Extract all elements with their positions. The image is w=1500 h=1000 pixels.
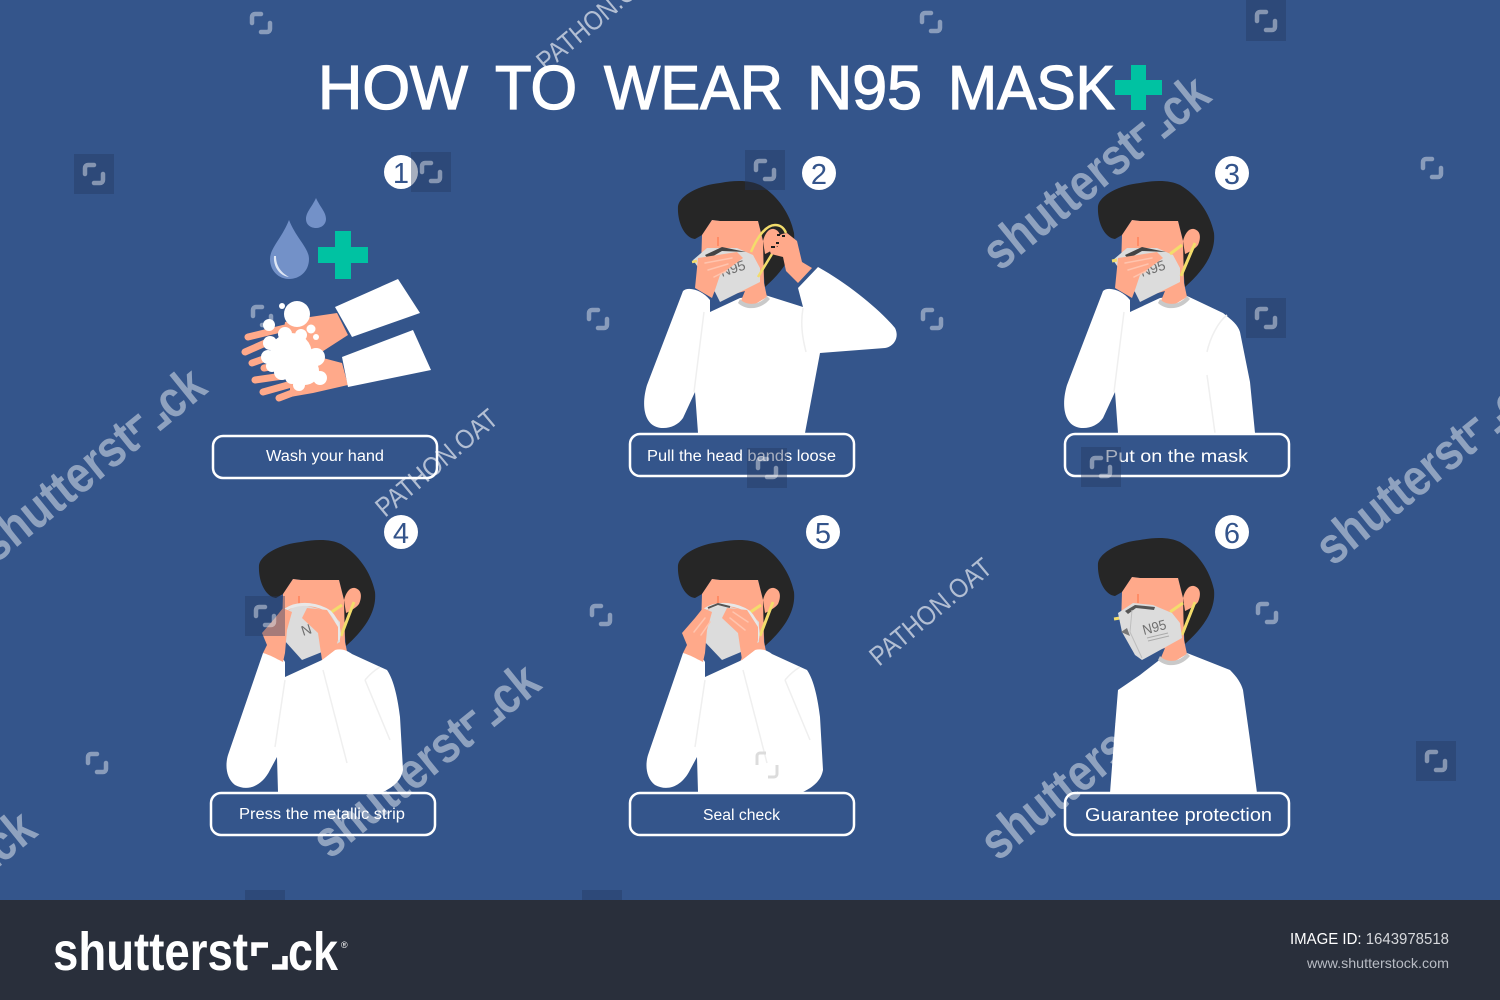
torso and arm (646, 649, 823, 792)
collar (1158, 296, 1190, 308)
label box 1 (213, 436, 437, 478)
watermarks: shutterst (968, 708, 1150, 871)
label box 1: Wash your hand (266, 448, 384, 465)
title: HOW (318, 54, 468, 123)
torso and arm (1064, 289, 1255, 433)
hand (1115, 252, 1163, 298)
label box 4 (211, 793, 435, 835)
panel: step 2 pull the head bands loose (630, 156, 897, 476)
label box 5: Seal check (703, 807, 780, 824)
collar (738, 296, 770, 308)
step number 4 (384, 515, 418, 550)
icon: soapy hands (245, 279, 431, 398)
hands (682, 608, 758, 662)
title: TO (495, 54, 577, 123)
watermarks: PATHON.OAT (370, 403, 504, 523)
footer logo: ® (341, 940, 348, 950)
title: MASK (948, 54, 1115, 123)
yellow bands (749, 602, 773, 636)
step number 3: 3 (1224, 159, 1240, 191)
collar (1158, 653, 1190, 665)
label box 4: Press the metallic strip (239, 806, 405, 823)
watermarks: shutterst (300, 706, 482, 869)
step number 2: 2 (811, 159, 827, 191)
mask (703, 604, 759, 660)
torso and arm (226, 649, 403, 792)
panel: step 6 guarantee protection (1065, 515, 1289, 835)
step number 5 (806, 515, 840, 550)
panel: step 5 seal check (630, 515, 854, 835)
step number 5: 5 (815, 518, 831, 550)
footer logo: ck (288, 922, 339, 982)
head and hair (678, 540, 794, 665)
yellow bands (1114, 602, 1195, 635)
icon: green cross (318, 231, 368, 279)
torso (1110, 653, 1257, 793)
step number 1: 1 (393, 158, 409, 190)
step number 2 (802, 156, 836, 191)
panel: step 4 press the metallic strip (211, 515, 435, 835)
panel: step 1 wash your hand (213, 155, 437, 478)
mask (693, 248, 760, 302)
step number 6: 6 (1224, 518, 1240, 550)
label box 3: Put on the mask (1105, 446, 1248, 466)
step number 1 (384, 155, 418, 190)
mask text: N95 (1138, 257, 1168, 280)
title: N95 (807, 54, 922, 123)
yellow bands (1112, 243, 1195, 276)
footer bar (0, 900, 1500, 1000)
label box 3 (1065, 434, 1289, 476)
figure 5 (646, 540, 823, 792)
head and hair (1098, 181, 1214, 306)
image id: IMAGE ID: 1643978518 (1290, 931, 1449, 948)
mask (1113, 248, 1180, 302)
mask text: N (299, 621, 314, 639)
yellow bands (330, 602, 354, 636)
hands (262, 608, 338, 662)
watermarks: ck (476, 651, 550, 726)
figure 2 (644, 181, 897, 433)
mask (1118, 603, 1182, 660)
mask (284, 604, 340, 660)
watermarks: ck (1144, 653, 1218, 728)
step number 6 (1215, 515, 1249, 550)
watermarks: shutterst (970, 118, 1152, 281)
figure 4 (226, 540, 403, 792)
title: WEAR (604, 54, 783, 123)
label box 6 (1065, 793, 1289, 835)
title (318, 54, 1115, 123)
watermarks: PATHON.OAT (864, 552, 998, 672)
watermarks: ck (1146, 63, 1220, 138)
label box 6: Guarantee protection (1085, 804, 1272, 825)
step number 3 (1215, 156, 1249, 191)
head and hair (1098, 538, 1214, 663)
panel: step 3 put on the mask (1064, 156, 1289, 476)
label box 5 (630, 793, 854, 835)
site url: www.shutterstock.com (1306, 955, 1449, 971)
icon: water drops (270, 198, 326, 279)
yellow bands (692, 225, 786, 277)
head and hair (678, 181, 794, 306)
figure 3 (1064, 181, 1255, 433)
label box 2: Pull the head bands loose (647, 448, 836, 465)
hands (695, 233, 812, 298)
head and hair (259, 540, 375, 665)
footer logo: shutterst (53, 922, 248, 982)
mask text: N95 (1141, 616, 1168, 638)
torso and arms (644, 267, 897, 433)
mask text: N95 (718, 257, 748, 280)
icon: title plus (1115, 65, 1162, 110)
label box 2 (630, 434, 854, 476)
watermarks: ck (142, 355, 216, 430)
step number 4: 4 (393, 518, 409, 550)
figure 6 (1098, 538, 1257, 793)
